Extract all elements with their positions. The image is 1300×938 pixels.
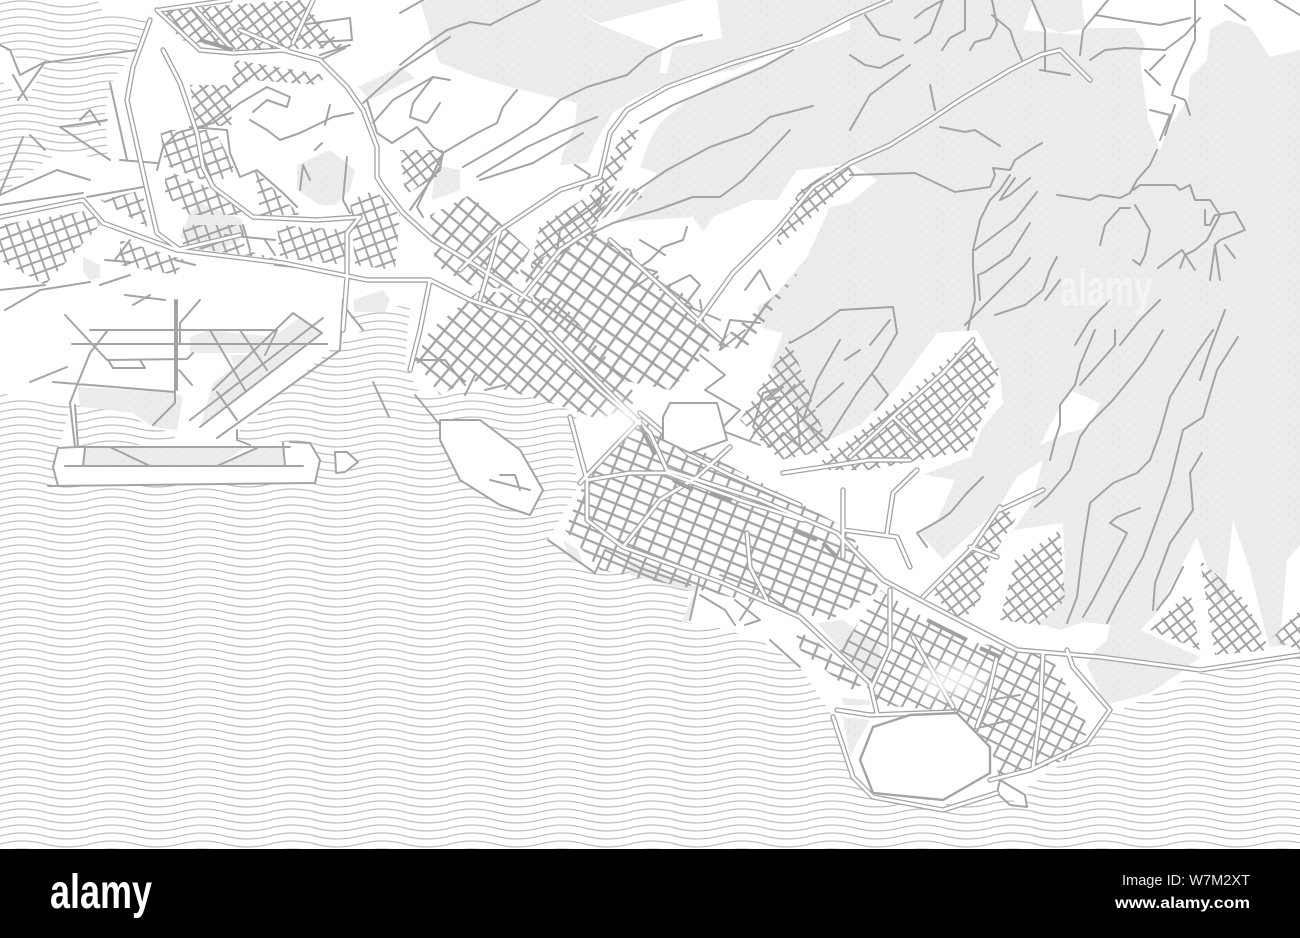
dense median strips (200, 40, 1000, 657)
watermark: alamy (1060, 260, 1152, 316)
image id: Image ID: W7M2XT (1122, 872, 1250, 889)
small terrain patches (78, 67, 880, 757)
mountains: grey terrain (420, 0, 1300, 705)
faded watermark glows (600, 404, 984, 694)
footer bar (0, 849, 1300, 938)
logo: alamy: alamy (50, 866, 152, 919)
landmark: Punchbowl crater (663, 403, 727, 453)
airport bay (77, 405, 175, 446)
landmark: Diamond Head crater (860, 713, 990, 800)
terrain: white clearings (580, 0, 1300, 660)
website: www.alamy.com (1114, 895, 1250, 912)
